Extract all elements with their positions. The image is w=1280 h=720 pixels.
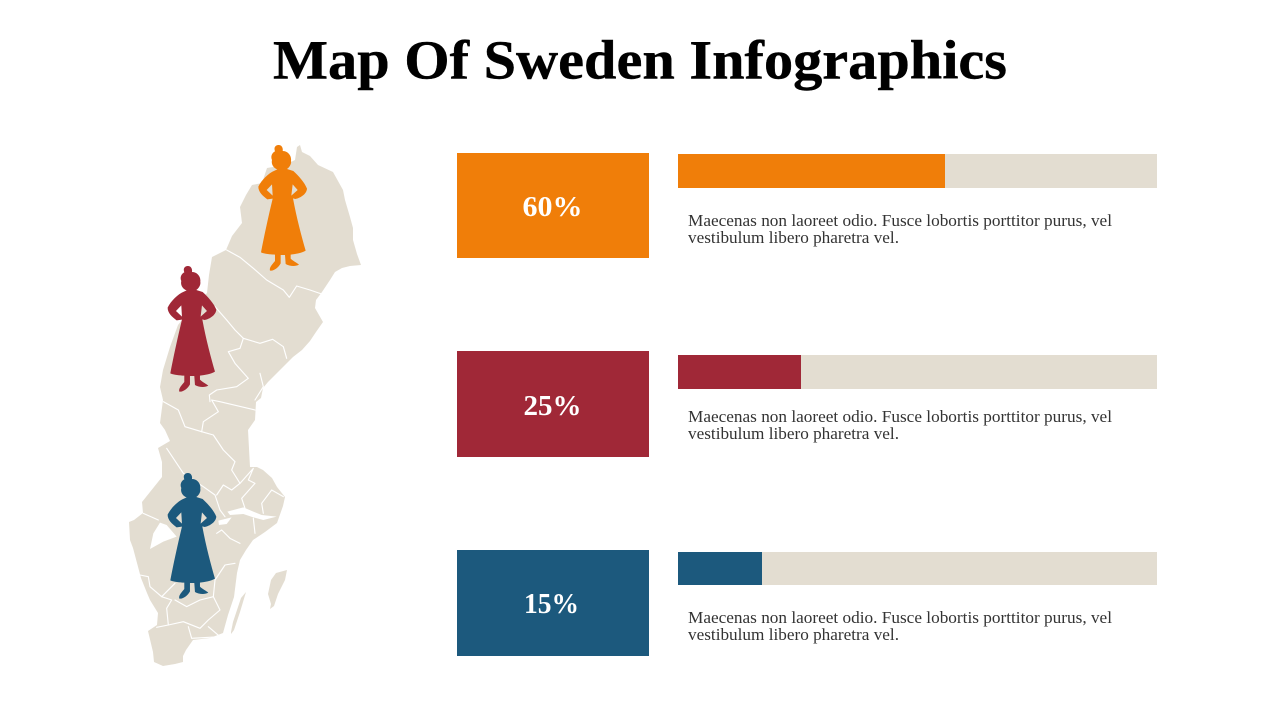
map of Sweden [129,145,361,666]
stat box 25% [457,351,649,457]
figure: orange woman [258,145,307,271]
description 15%: vestibulum libero pharetra vel. [688,625,899,644]
stat box 60% [457,153,649,258]
map: lakes [150,523,177,549]
progress bar 25% [678,355,1157,389]
description 60%: vestibulum libero pharetra vel. [688,228,899,247]
description 25%: Maecenas non laoreet odio. Fusce lobortis porttitor purus, vel [688,407,1112,426]
map: county borders north [209,250,322,402]
progress bar 15% [678,552,1157,585]
stat box 60%: 60% [522,191,582,223]
figure: red woman [168,266,216,392]
description 60% [688,211,1112,247]
map: county borders south [140,400,283,638]
map: Gotland island [268,570,287,609]
stat box 25%: 25% [524,390,582,422]
stat box 15% [457,550,649,656]
figure: blue woman [168,473,216,599]
panel: 25% row [457,351,1157,457]
title: Map Of Sweden Infographics [273,30,1007,90]
description 25% [688,407,1112,443]
stat box 15%: 15% [524,588,579,620]
description 25%: vestibulum libero pharetra vel. [688,424,899,443]
panel: 15% row [457,550,1157,656]
progress bar 60% [678,154,1157,188]
map: mainland outline [129,145,361,666]
description 15%: Maecenas non laoreet odio. Fusce lobortis porttitor purus, vel [688,608,1112,627]
description 15% [688,608,1112,644]
map: Öland island [231,592,246,634]
panel: 60% row [457,153,1157,258]
description 60%: Maecenas non laoreet odio. Fusce lobortis porttitor purus, vel [688,211,1112,230]
